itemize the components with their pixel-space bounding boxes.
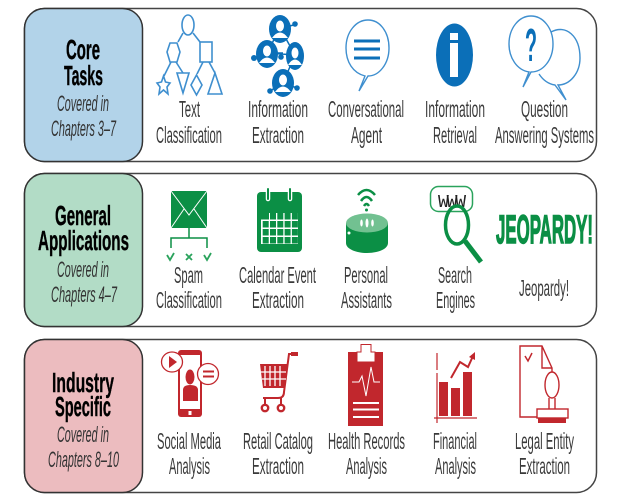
- icon: information extraction network: [251, 15, 304, 97]
- label: personal assistants: [341, 262, 392, 313]
- panel: general applications label block: [24, 174, 142, 326]
- panel: general applications label block: Covered in: [57, 257, 109, 282]
- label: question answering systems: [495, 96, 594, 148]
- label: text classification: Text: [179, 96, 200, 122]
- panel: industry specific: [24, 340, 596, 492]
- panel: core tasks: Classification: [156, 122, 222, 148]
- icon: information retrieval: [436, 24, 473, 86]
- panel: general applications: Classification: [156, 287, 222, 313]
- panel: industry specific: Health Records: [328, 428, 405, 454]
- label: financial analysis: [433, 428, 477, 479]
- label: personal assistants: Personal: [344, 262, 388, 288]
- icon: conversational agent bubble: [346, 20, 389, 91]
- label: spam classification: [156, 262, 222, 313]
- label: question answering systems: Question: [521, 96, 568, 122]
- label: legal entity extraction: [515, 428, 574, 479]
- label: legal entity extraction: Extraction: [519, 453, 570, 479]
- panel: general applications: Calendar Event: [239, 262, 316, 288]
- icon: question bubbles: ?: [525, 19, 537, 71]
- panel: industry specific: Financial: [433, 428, 477, 454]
- label: retail catalog extraction: Extraction: [252, 453, 304, 479]
- panel: general applications: [24, 174, 596, 326]
- label: information extraction: [248, 96, 308, 148]
- icon: search www magnifier: WWW: [438, 193, 466, 213]
- label: conversational agent: [328, 96, 404, 148]
- panel: industry specific label block: Specific: [55, 391, 111, 422]
- panel: industry specific label block: [24, 340, 142, 492]
- panel: core tasks: Conversational: [328, 96, 404, 122]
- panel: industry specific: Social Media: [157, 428, 221, 454]
- label: social media analysis: Analysis: [169, 453, 210, 479]
- panel: general applications: Jeopardy!: [519, 275, 569, 301]
- label: information extraction: Extraction: [252, 122, 304, 148]
- label: information extraction: Information: [248, 96, 308, 122]
- label: search engines: Search: [438, 262, 472, 288]
- label: social media analysis: [157, 428, 221, 479]
- panel: core tasks label block: Core: [66, 34, 100, 65]
- panel: general applications: Assistants: [341, 287, 392, 313]
- icon: search www magnifier: [430, 186, 481, 262]
- panel: industry specific label block: Industry: [52, 367, 114, 398]
- label: calendar event extraction: Extraction: [252, 287, 304, 313]
- icon: calendar: [257, 189, 302, 252]
- panel: general applications label block: General: [55, 200, 111, 231]
- panel: general applications label block: Chapters 4–7: [51, 282, 117, 307]
- label: spam classification: Spam: [174, 262, 203, 288]
- icon: text classification tree: [157, 15, 222, 95]
- label: health records analysis: [328, 428, 405, 479]
- panel: industry specific label block: Covered in: [57, 422, 109, 447]
- icon: question bubbles: [509, 16, 580, 100]
- label: information retrieval: Information: [425, 96, 485, 122]
- panel: core tasks label block: Covered in: [57, 91, 109, 116]
- label: text classification: [156, 96, 222, 148]
- label: retail catalog extraction: [243, 428, 313, 479]
- icon: health records clipboard: [348, 344, 383, 426]
- panel: general applications: Engines: [436, 287, 475, 313]
- label: information retrieval: [425, 96, 485, 148]
- panel: core tasks label block: Chapters 3–7: [51, 116, 116, 141]
- label: search engines: [436, 262, 475, 313]
- panel: core tasks: [24, 8, 596, 162]
- icon: smart speaker: [346, 190, 388, 253]
- panel: core tasks label block: Tasks: [64, 60, 103, 91]
- panel: general applications label block: Applications: [38, 225, 129, 256]
- icon: legal stamp and document: [520, 346, 568, 423]
- label: information retrieval: Retrieval: [433, 122, 477, 148]
- panel: core tasks label block: [24, 8, 142, 162]
- panel: industry specific label block: Chapters 8–10: [48, 447, 119, 472]
- panel: industry specific: Retail Catalog: [243, 428, 313, 454]
- label: calendar event extraction: [239, 262, 316, 313]
- panel: industry specific: Analysis: [435, 453, 476, 479]
- label: health records analysis: Analysis: [346, 453, 387, 479]
- label: conversational agent: Agent: [351, 122, 382, 148]
- icon: social media phone: [162, 350, 218, 417]
- icon: spam envelope: [167, 191, 211, 260]
- icon: financial chart: [434, 352, 477, 423]
- icon: shopping cart: [260, 352, 298, 411]
